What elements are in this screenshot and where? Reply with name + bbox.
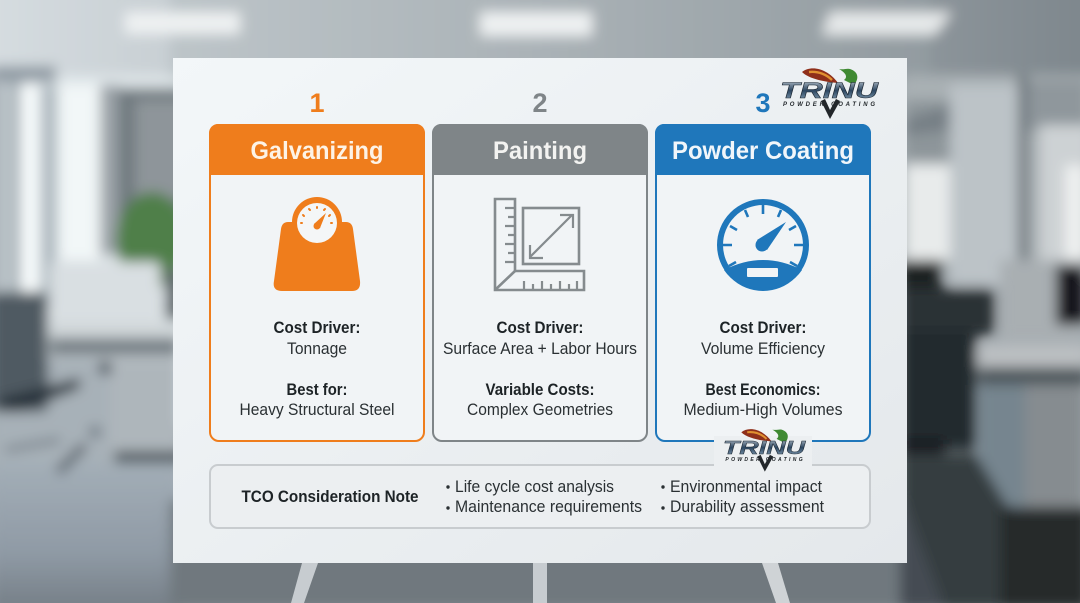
header band [209,124,425,175]
panel: powder coating: Volume Efficiency [701,340,826,358]
panel: galvanizing: Heavy Structural Steel [240,401,394,419]
logo: bottom [723,429,806,472]
heading: Painting [493,137,587,165]
icon: speedometer [720,202,806,288]
header band [432,124,648,175]
logo: top right [780,68,880,119]
text: cost driver: Cost Driver: [720,319,806,337]
panel: painting: Surface Area + Labor Hours [443,340,637,358]
step number 1: 1 [309,88,325,118]
logo backing patch [714,436,812,470]
text: cost driver: Cost Driver: [496,319,584,337]
card outline [656,125,870,441]
icon: ruler and area [495,199,584,290]
card outline [210,125,424,441]
panel: TCO note [210,465,870,528]
panel: powder coating: Medium-High Volumes [684,401,842,419]
step number 2: 2 [532,88,548,118]
TCO heading: TCO Consideration Note [242,488,418,506]
icon: weighing scale [274,197,360,291]
board panel [173,58,907,563]
panel: galvanizing [209,124,425,441]
bullet list left: Maintenance requirements [455,498,642,516]
panel: powder coating [655,124,871,441]
panel: painting [432,124,648,441]
heading: Powder Coating [672,137,854,165]
bullet list left [446,478,642,516]
text: variable costs: Variable Costs: [486,381,594,399]
text: best economics: Best Economics: [706,381,820,399]
bullet list right [661,478,824,516]
bullet list left: Life cycle cost analysis [455,478,614,496]
header band [655,124,871,175]
bullet list right: Environmental impact [670,478,822,496]
text: best for: Best for: [286,381,348,399]
text: cost driver: Cost Driver: [274,319,360,337]
bullet list right: Durability assessment [670,498,824,516]
step number 3: 3 [755,88,771,118]
panel: galvanizing: Tonnage [287,340,347,358]
card outline [433,125,647,441]
easel legs [291,563,790,603]
heading: Galvanizing [250,137,384,165]
panel: painting: Complex Geometries [467,401,613,419]
